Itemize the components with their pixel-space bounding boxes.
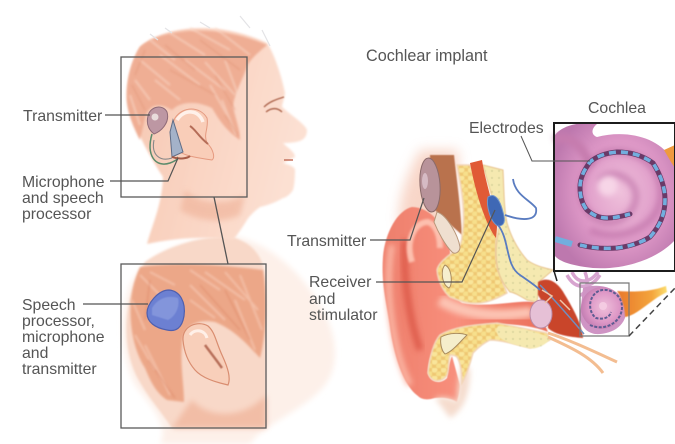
hair streaks <box>130 28 250 135</box>
label: speech processor, microphone and transmitter: and <box>22 345 48 362</box>
label: speech processor, microphone and transmitter <box>22 297 148 378</box>
icon: implant wire <box>498 179 540 290</box>
small cochlea callout box <box>580 283 629 336</box>
dashed connector <box>629 288 675 336</box>
label: electrodes: Electrodes <box>469 120 544 137</box>
illustration: small cochlea <box>580 286 626 334</box>
illustration: fatty tissue lower <box>428 323 550 383</box>
illustration: lower head, back view <box>123 236 335 444</box>
icon: transmitter disc, side view <box>418 157 442 213</box>
illustration: cartilage <box>434 212 460 288</box>
icon: speech processor on scalp <box>147 290 184 330</box>
connector: inset corner <box>554 271 557 281</box>
icon: receiver and stimulator <box>487 195 504 226</box>
icon: transmitter disc <box>147 107 168 134</box>
illustration: eardrum and middle ear <box>530 280 584 338</box>
label: receiver and stimulator: stimulator <box>309 307 377 324</box>
label: receiver and stimulator: Receiver <box>309 274 371 291</box>
icon: processor and cable <box>150 120 190 164</box>
spiral shading <box>581 151 661 235</box>
red tissue stripe <box>470 160 497 238</box>
illustration: auditory nerve <box>617 286 667 317</box>
ear body <box>383 207 548 402</box>
illustration: fatty tissue upper <box>437 165 507 303</box>
label: transmitter right: Transmitter <box>287 233 366 250</box>
icon: electrode array <box>555 152 665 248</box>
soft glow <box>399 150 458 230</box>
illustration: outer ear cross-section <box>383 150 667 418</box>
label: microphone and speech processor: processor <box>22 206 91 223</box>
label: microphone and speech processor <box>22 158 178 223</box>
label: microphone and speech processor: and speech <box>22 190 104 207</box>
label: microphone and speech processor: Microphone <box>22 174 105 191</box>
illustration: ear canal lining <box>548 333 617 373</box>
box: lower head <box>121 264 266 428</box>
brown tissue <box>430 155 462 235</box>
label: speech processor, microphone and transmitter: processor, <box>22 313 95 330</box>
label: speech processor, microphone and transmitter: transmitter <box>22 361 97 378</box>
illustration: upper head, profile <box>127 16 307 244</box>
label: transmitter left <box>23 108 150 125</box>
label: receiver and stimulator <box>309 210 495 324</box>
box: upper head <box>121 57 247 197</box>
label: electrodes <box>469 120 590 161</box>
label: speech processor, microphone and transmitter: Speech <box>22 297 76 314</box>
label: transmitter left: Transmitter <box>23 108 102 125</box>
illustration: bone upper <box>483 165 553 302</box>
illustration: semicircular canals <box>567 272 600 295</box>
label: transmitter right <box>287 198 424 250</box>
label: speech processor, microphone and transmitter: microphone <box>22 329 105 346</box>
illustration: ear, back view <box>183 324 229 385</box>
label: receiver and stimulator: and <box>309 291 335 308</box>
label: cochlea: Cochlea <box>588 100 646 117</box>
hair streaks <box>132 270 262 395</box>
panel: cochlea inset <box>554 123 675 271</box>
illustration: ear with implant <box>173 109 214 160</box>
title: Cochlear implant <box>366 47 488 65</box>
connector between boxes <box>214 197 228 264</box>
